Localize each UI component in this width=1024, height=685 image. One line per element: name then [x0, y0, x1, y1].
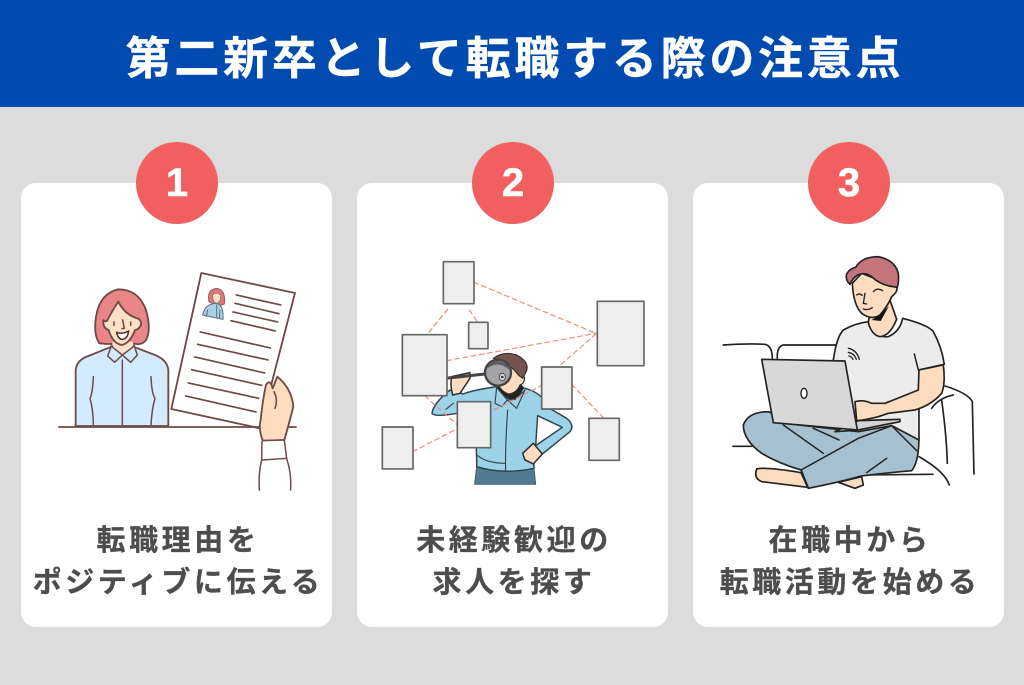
- woman's shirt: [76, 347, 168, 426]
- dashed connection lines: [413, 282, 603, 452]
- magnifier: [448, 360, 511, 386]
- woman's face: [103, 302, 141, 345]
- label: card 3: [720, 525, 980, 599]
- label: card 1: [33, 525, 323, 599]
- icon: man working on laptop on sofa: [723, 257, 974, 488]
- job listing cards: [382, 262, 644, 469]
- number badge 3: [808, 142, 890, 224]
- laptop: [835, 419, 900, 432]
- man's face: [852, 273, 897, 317]
- raised hand: [451, 373, 470, 395]
- title banner: [0, 0, 1024, 107]
- man's hair: [493, 353, 527, 378]
- woman's hair: [95, 289, 149, 344]
- feet: [756, 468, 808, 487]
- label: card 2: 求人を探す: [432, 567, 596, 599]
- resume sheet: [171, 273, 295, 428]
- label: card 1: 転職理由を: [96, 525, 260, 557]
- desk line: [59, 424, 296, 430]
- label: card 3: 転職活動を始める: [720, 567, 980, 599]
- hand holding resume: [260, 377, 293, 441]
- panel: card 1: [21, 183, 332, 627]
- icon: woman presenting a resume: [59, 273, 296, 490]
- number badge 2: 2: [502, 161, 524, 205]
- man's arm and hand: [855, 365, 944, 421]
- number badge 1: [136, 142, 218, 224]
- panel: card 3: [693, 183, 1004, 627]
- legs: [743, 412, 919, 488]
- number badge 2: [472, 142, 554, 224]
- label: card 2: [416, 524, 612, 599]
- number badge 1: 1: [166, 161, 188, 205]
- panel: card 2: [357, 183, 668, 627]
- resume photo: [209, 288, 225, 306]
- sleeve: [259, 440, 291, 490]
- man's face: [498, 363, 525, 394]
- number badge 3: 3: [838, 161, 860, 205]
- label: card 1: ポジティブに伝える: [33, 567, 323, 599]
- trousers: [475, 467, 536, 484]
- woman's neck: [112, 342, 134, 357]
- gap between arm and body: [536, 416, 562, 446]
- collar: [495, 387, 525, 408]
- t-shirt: [833, 318, 944, 440]
- title: 第二新卒として転職する際の注意点: [126, 33, 904, 84]
- resume text lines: [186, 295, 281, 412]
- woman's collar: [108, 345, 137, 362]
- man's hair: [846, 257, 899, 287]
- icon: man searching job listings with magnifier: [382, 262, 644, 484]
- hand on hip: [523, 443, 542, 464]
- label: card 2: 未経験歓迎の: [416, 525, 612, 557]
- man's neck: [868, 300, 897, 337]
- wifi symbol: [848, 348, 859, 359]
- label: card 3: 在職中から: [768, 525, 932, 557]
- beard and neck shadow: [497, 383, 524, 400]
- man's shirt: [432, 387, 572, 471]
- sofa: [723, 344, 974, 485]
